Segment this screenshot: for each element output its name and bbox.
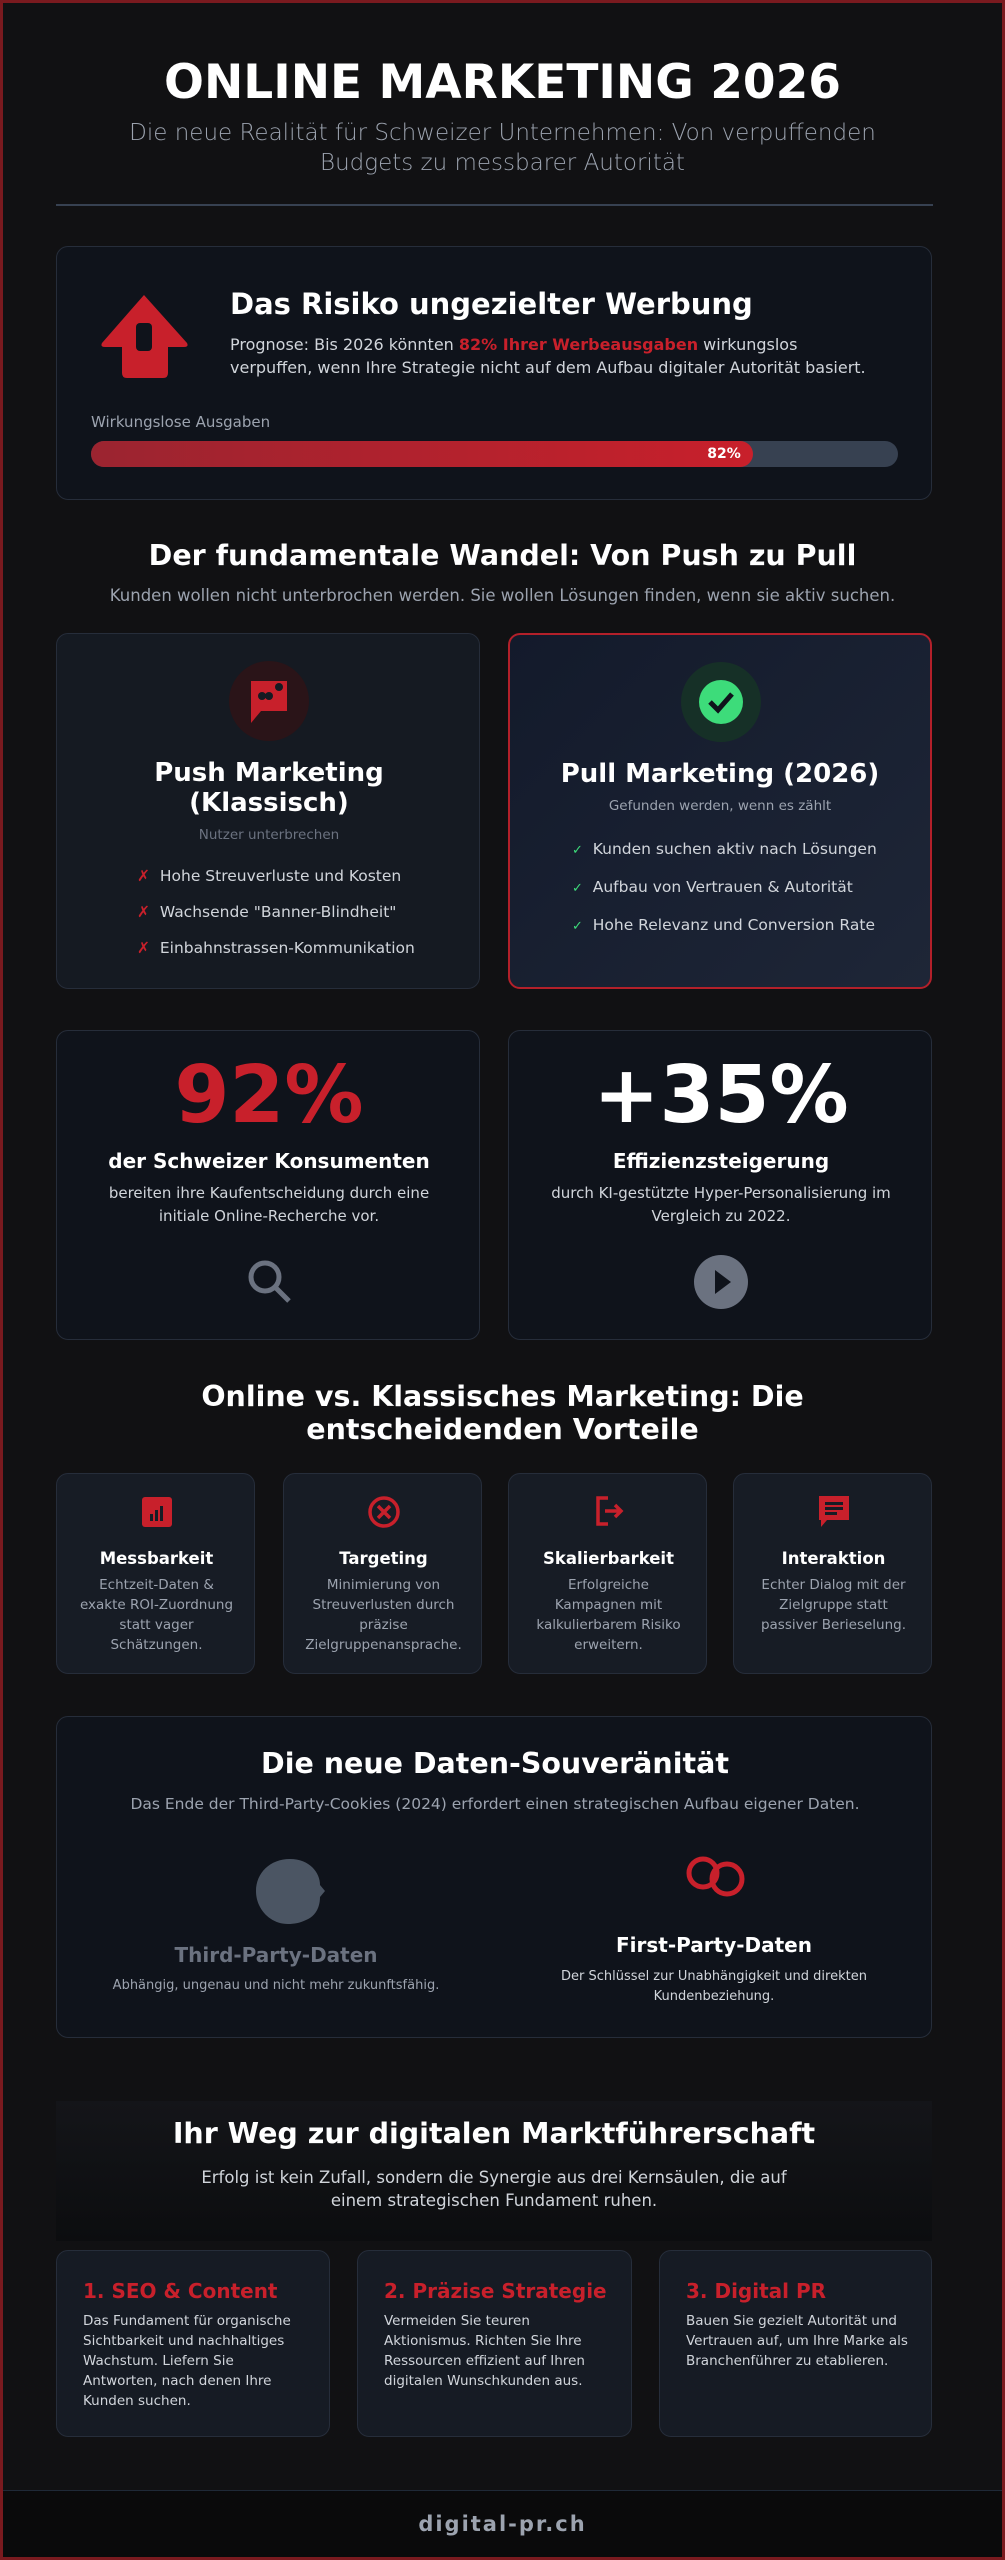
feature: Targeting: Targeting <box>339 1549 428 1568</box>
icon: chart <box>142 1497 172 1527</box>
feature: Skalierbarkeit <box>508 1473 707 1674</box>
step 2 <box>357 2250 632 2437</box>
stat text: durch KI-gestützte Hyper-Personalisierung im Vergleich zu 2022. <box>551 1184 891 1225</box>
icon: warning arrow <box>101 295 188 378</box>
icon: grey head <box>256 1859 325 1924</box>
title: ONLINE MARKETING 2026 <box>164 55 841 110</box>
push subtitle: Nutzer unterbrechen <box>199 827 339 843</box>
step 2: 2. Präzise Strategie <box>384 2279 607 2303</box>
progress bar 82% <box>91 441 898 467</box>
pull list: ✓ Kunden suchen aktiv nach Lösungen <box>572 840 877 858</box>
step 1: Das Fundament für organische Sichtbarkeit und nachhaltiges Wachstum. Liefern Sie Antworten, nach denen Ihre Kunden suchen. <box>83 2313 291 2409</box>
third-party block: Third-Party-Daten <box>174 1943 378 1967</box>
pull subtitle: Gefunden werden, wenn es zählt <box>609 798 831 814</box>
push title: (Klassisch) <box>189 788 349 818</box>
data subtitle: Das Ende der Third-Party-Cookies (2024) erfordert einen strategischen Aufbau eigener Daten. <box>130 1795 860 1813</box>
third-party block: Abhängig, ungenau und nicht mehr zukunftsfähig. <box>113 1978 439 1993</box>
subheading: Kunden wollen nicht unterbrochen werden. Sie wollen Lösungen finden, wenn sie aktiv suchen. <box>110 586 895 605</box>
pull list: ✓ Hohe Relevanz und Conversion Rate <box>572 916 875 934</box>
push list: ✗ Hohe Streuverluste und Kosten <box>137 867 401 885</box>
feature: Skalierbarkeit: Skalierbarkeit <box>543 1549 674 1568</box>
panel: feature cards <box>56 1473 932 1674</box>
stat text: bereiten ihre Kaufentscheidung durch eine initiale Online-Recherche vor. <box>109 1184 429 1225</box>
pull list <box>572 840 877 934</box>
stat label: der Schweizer Konsumenten <box>108 1149 430 1173</box>
step 3 <box>659 2250 932 2437</box>
icon: search <box>248 1260 291 1303</box>
feature: Interaktion <box>733 1473 932 1674</box>
icon: linked rings <box>686 1856 744 1896</box>
stat label: Effizienzsteigerung <box>613 1149 829 1173</box>
stat number: 92% <box>174 1049 364 1141</box>
panel: risk <box>56 246 932 500</box>
feature: Skalierbarkeit: Erfolgreiche Kampagnen mit kalkulierbarem Risiko erweitern. <box>536 1577 681 1653</box>
panel: push marketing <box>56 633 480 989</box>
first-party block <box>561 1856 867 2004</box>
step 3: 3. Digital PR <box>686 2279 826 2303</box>
risk heading: Das Risiko ungezielter Werbung <box>230 287 753 321</box>
pull list: ✓ Aufbau von Vertrauen & Autorität <box>572 878 853 896</box>
step cards <box>56 2250 932 2437</box>
step 3: Bauen Sie gezielt Autorität und Vertrauen auf, um Ihre Marke als Branchenführer zu etablieren. <box>686 2313 908 2369</box>
feature: Interaktion: Interaktion <box>782 1549 885 1568</box>
first-party block: First-Party-Daten <box>616 1933 812 1957</box>
footer <box>0 2490 1005 2560</box>
push title: Push Marketing <box>154 758 384 788</box>
heading: advantages: Online vs. Klassisches Marketing: Die entscheidenden Vorteile <box>201 1380 804 1446</box>
icon: chat bubble <box>229 661 309 741</box>
feature: Interaktion: Echter Dialog mit der Zielgruppe statt passiver Berieselung. <box>761 1577 906 1633</box>
feature: Targeting: Minimierung von Streuverlusten durch präzise Zielgruppenansprache. <box>305 1577 462 1653</box>
push list <box>137 867 415 957</box>
step 1 <box>56 2250 330 2437</box>
panel: path to leadership <box>56 2101 932 2241</box>
step 2: Vermeiden Sie teuren Aktionismus. Richten Sie Ihre Ressourcen effizient auf Ihren digitalen Wunschkunden aus. <box>384 2313 585 2389</box>
pull title: Pull Marketing (2026) <box>561 759 879 789</box>
panel: stat 92% <box>56 1030 480 1340</box>
icon: message <box>819 1496 849 1527</box>
bar label: Wirkungslose Ausgaben <box>91 413 270 431</box>
icon: target x <box>368 1496 400 1528</box>
panel: pull marketing <box>508 633 932 989</box>
icon: check <box>681 662 761 742</box>
feature: Messbarkeit: Echtzeit-Daten & exakte ROI-Zuordnung statt vager Schätzungen. <box>80 1577 233 1653</box>
data heading: Die neue Daten-Souveränität <box>261 1747 729 1780</box>
panel: stat 35% <box>508 1030 932 1340</box>
step 1: 1. SEO & Content <box>83 2279 278 2303</box>
heading: push to pull: Der fundamentale Wandel: Von Push zu Pull <box>149 539 856 572</box>
leadership subtitle: Erfolg ist kein Zufall, sondern die Synergie aus drei Kernsäulen, die auf einem strategischen Fundament ruhen. <box>201 2168 787 2210</box>
push list: ✗ Wachsende "Banner-Blindheit" <box>137 903 396 921</box>
feature: Messbarkeit: Messbarkeit <box>100 1549 213 1568</box>
progress bar 82%: 82% <box>707 446 741 462</box>
feature: Messbarkeit <box>56 1473 255 1674</box>
icon: play <box>694 1255 748 1309</box>
push list: ✗ Einbahnstrassen-Kommunikation <box>137 939 415 957</box>
risk text: Prognose: Bis 2026 könnten 82% Ihrer Werbeausgaben wirkungslos verpuffen, wenn Ihre Strategie nicht auf dem Aufbau digitaler Autorität basiert. <box>230 335 866 377</box>
leadership heading: Ihr Weg zur digitalen Marktführerschaft <box>173 2117 815 2150</box>
first-party block: Der Schlüssel zur Unabhängigkeit und direkten Kundenbeziehung. <box>561 1969 867 2004</box>
third-party block <box>112 1859 439 1993</box>
footer: digital-pr.ch <box>418 2512 587 2536</box>
stat number: +35% <box>593 1049 849 1141</box>
push title <box>154 758 384 818</box>
icon: exit arrow <box>596 1496 624 1526</box>
panel: data sovereignty <box>56 1716 932 2038</box>
feature: Targeting <box>283 1473 482 1674</box>
subtitle: Die neue Realität für Schweizer Unternehmen: Von verpuffenden Budgets zu messbarer Autorität <box>129 120 876 176</box>
